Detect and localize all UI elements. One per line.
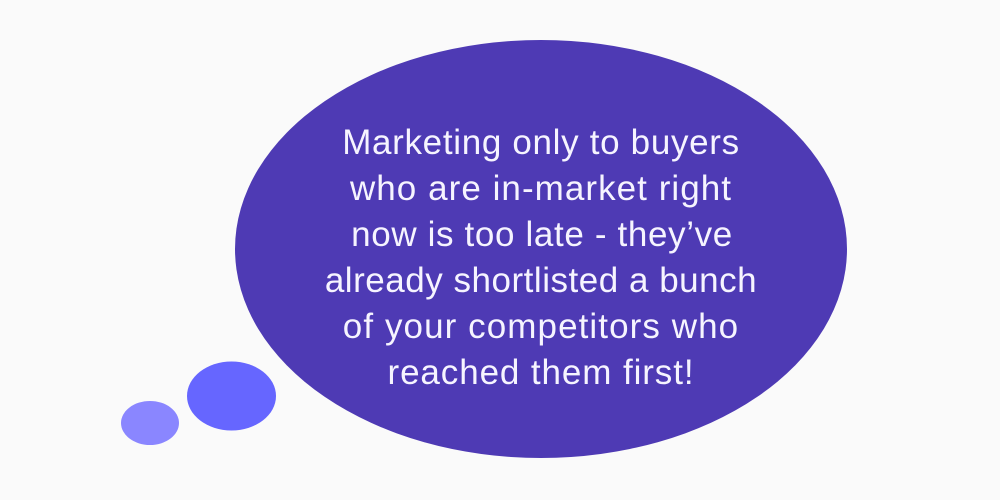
main speech bubble [235,40,847,458]
bubble text: of your competitors who [343,307,739,346]
bubble text [325,123,757,392]
medium thought circle [187,362,276,430]
bubble text: Marketing only to buyers [342,123,740,162]
bubble text: already shortlisted a bunch [325,261,757,300]
small thought circle [121,401,179,445]
bubble text: who are in-market right [350,169,732,208]
bubble text: reached them first! [388,353,694,392]
bubble text: now is too late - they’ve [351,215,733,254]
